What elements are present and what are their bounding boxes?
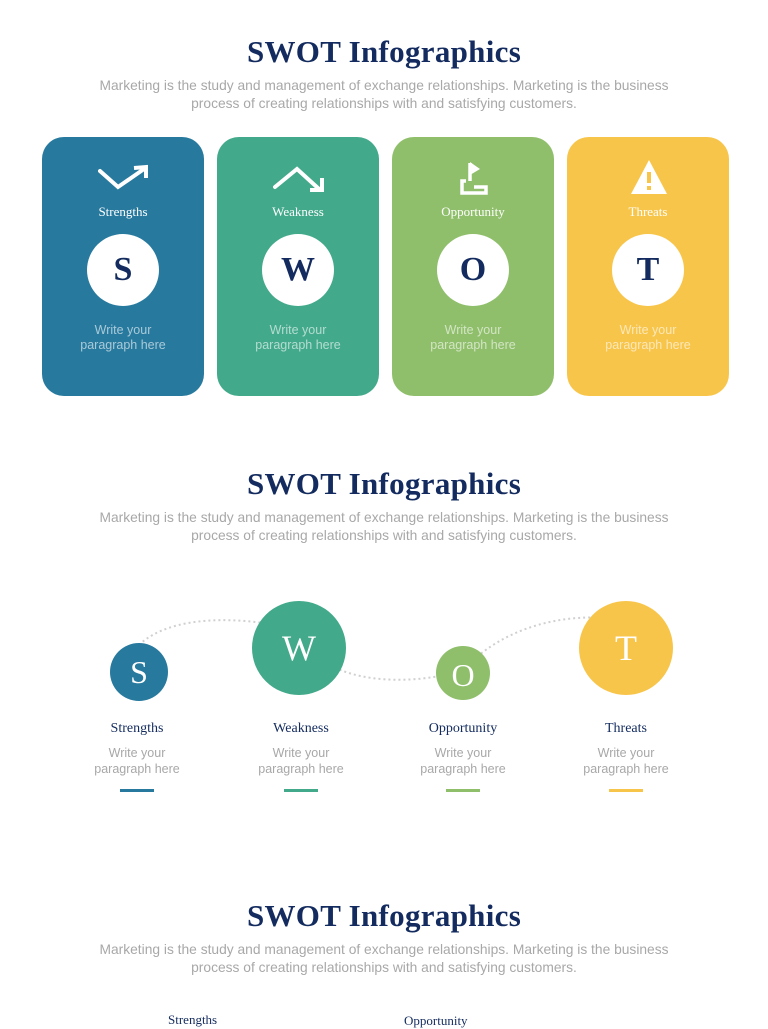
circle O xyxy=(436,646,490,700)
card: threats: paragraph here xyxy=(605,338,691,352)
card: strengths xyxy=(42,137,204,396)
card: weakness: paragraph here xyxy=(255,338,341,352)
item opportunity: Write your xyxy=(435,746,491,760)
item threats: Write your xyxy=(598,746,654,760)
item strengths: Write your xyxy=(109,746,165,760)
card: weakness xyxy=(217,137,379,396)
circle S: S xyxy=(130,654,148,690)
subtitle 3: Marketing is the study and management of exchange relationships. Marketing is the business xyxy=(99,942,669,957)
card: threats: Threats xyxy=(628,204,667,219)
card: threats xyxy=(567,137,729,396)
item threats xyxy=(583,721,669,792)
title 2: SWOT Infographics xyxy=(247,466,521,501)
item strengths xyxy=(94,721,180,792)
item strengths: paragraph here xyxy=(94,762,180,776)
item weakness: paragraph here xyxy=(258,762,344,776)
card: opportunity: Opportunity xyxy=(441,204,505,219)
item weakness xyxy=(258,721,344,792)
card: threats: Write your xyxy=(620,323,676,337)
circle W: W xyxy=(282,628,316,668)
card: threats: T xyxy=(637,251,659,288)
card: strengths: paragraph here xyxy=(80,338,166,352)
circle T: T xyxy=(615,628,637,668)
title 3: SWOT Infographics xyxy=(247,898,521,933)
icon: up trend arrow xyxy=(98,164,148,190)
item opportunity: Opportunity xyxy=(429,721,497,736)
card: opportunity: Write your xyxy=(445,323,501,337)
circle O: O xyxy=(451,657,475,693)
card: weakness: W xyxy=(281,251,315,288)
icon: down trend arrow xyxy=(273,166,324,192)
card: strengths: Write your xyxy=(95,323,151,337)
item opportunity xyxy=(420,721,506,792)
card: opportunity: paragraph here xyxy=(430,338,516,352)
item threats: paragraph here xyxy=(583,762,669,776)
subtitle 2 xyxy=(99,510,669,543)
dotted connector curve xyxy=(142,616,590,681)
card: strengths: S xyxy=(114,251,132,288)
subtitle 2: Marketing is the study and management of exchange relationships. Marketing is the business xyxy=(99,510,669,525)
icon: warning xyxy=(631,160,667,194)
subtitle 3 xyxy=(99,942,669,975)
subtitle 1: Marketing is the study and management of exchange relationships. Marketing is the business xyxy=(99,78,669,93)
subtitle 1 xyxy=(99,78,669,111)
card: weakness: Write your xyxy=(270,323,326,337)
subtitle 2: process of creating relationships with and satisfying customers. xyxy=(191,528,577,542)
card: opportunity xyxy=(392,137,554,396)
card: strengths: Strengths xyxy=(98,204,148,219)
item opportunity: paragraph here xyxy=(420,762,506,776)
subtitle 1: process of creating relationships with and satisfying customers. xyxy=(191,96,577,110)
item strengths: Strengths xyxy=(111,721,163,736)
card: weakness: Weakness xyxy=(272,204,324,219)
label strengths 3: Strengths xyxy=(168,1012,217,1027)
item weakness: Write your xyxy=(273,746,329,760)
circle S xyxy=(110,643,168,701)
circle T xyxy=(579,601,673,695)
subtitle 3: process of creating relationships with and satisfying customers. xyxy=(191,960,577,974)
title 1: SWOT Infographics xyxy=(247,34,521,69)
item weakness: Weakness xyxy=(273,721,329,736)
icon: flag xyxy=(460,162,488,195)
circle W xyxy=(252,601,346,695)
label opportunity 3: Opportunity xyxy=(404,1013,468,1028)
card: opportunity: O xyxy=(460,251,486,288)
item threats: Threats xyxy=(605,721,647,736)
